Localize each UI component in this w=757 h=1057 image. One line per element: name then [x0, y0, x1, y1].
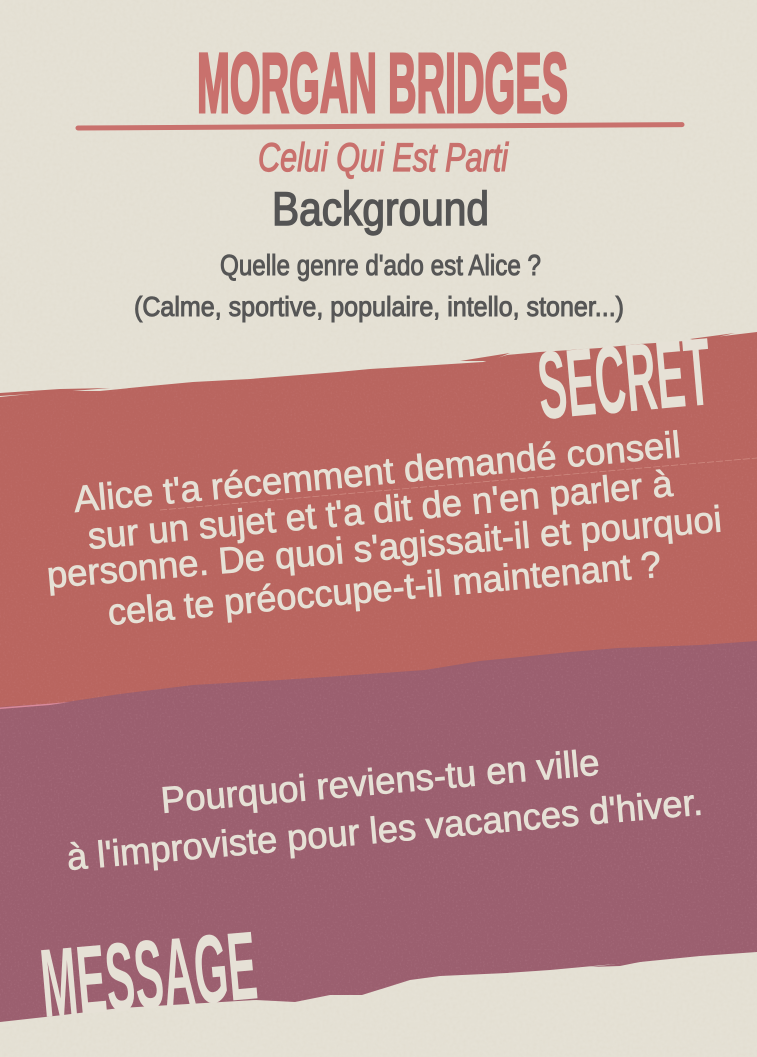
- panel: message: MESSAGE: [36, 911, 261, 1038]
- secret text: sur un sujet et t'a dit de n'en parler à: [86, 463, 675, 557]
- heading: background: Background: [272, 182, 489, 235]
- background question: Quelle genre d'ado est Alice ?: [220, 250, 541, 282]
- secret text: cela te préoccupe-t-il maintenant ?: [106, 544, 663, 633]
- subtitle: Celui Qui Est Parti: [258, 136, 509, 180]
- secret text: personne. De quoi s'agissait-il et pourquoi: [45, 498, 723, 596]
- panel: message: [0, 640, 757, 1038]
- secret text: Alice t'a récemment demandé conseil: [72, 424, 682, 520]
- message text: à l'improviste pour les vacances d'hiver.: [65, 782, 704, 878]
- secret text: [45, 424, 723, 633]
- title underline: [78, 125, 682, 128]
- message text: Pourquoi reviens-tu en ville: [159, 742, 601, 821]
- background examples: (Calme, sportive, populaire, intello, stoner...): [134, 291, 624, 322]
- panel: secret: [0, 318, 757, 720]
